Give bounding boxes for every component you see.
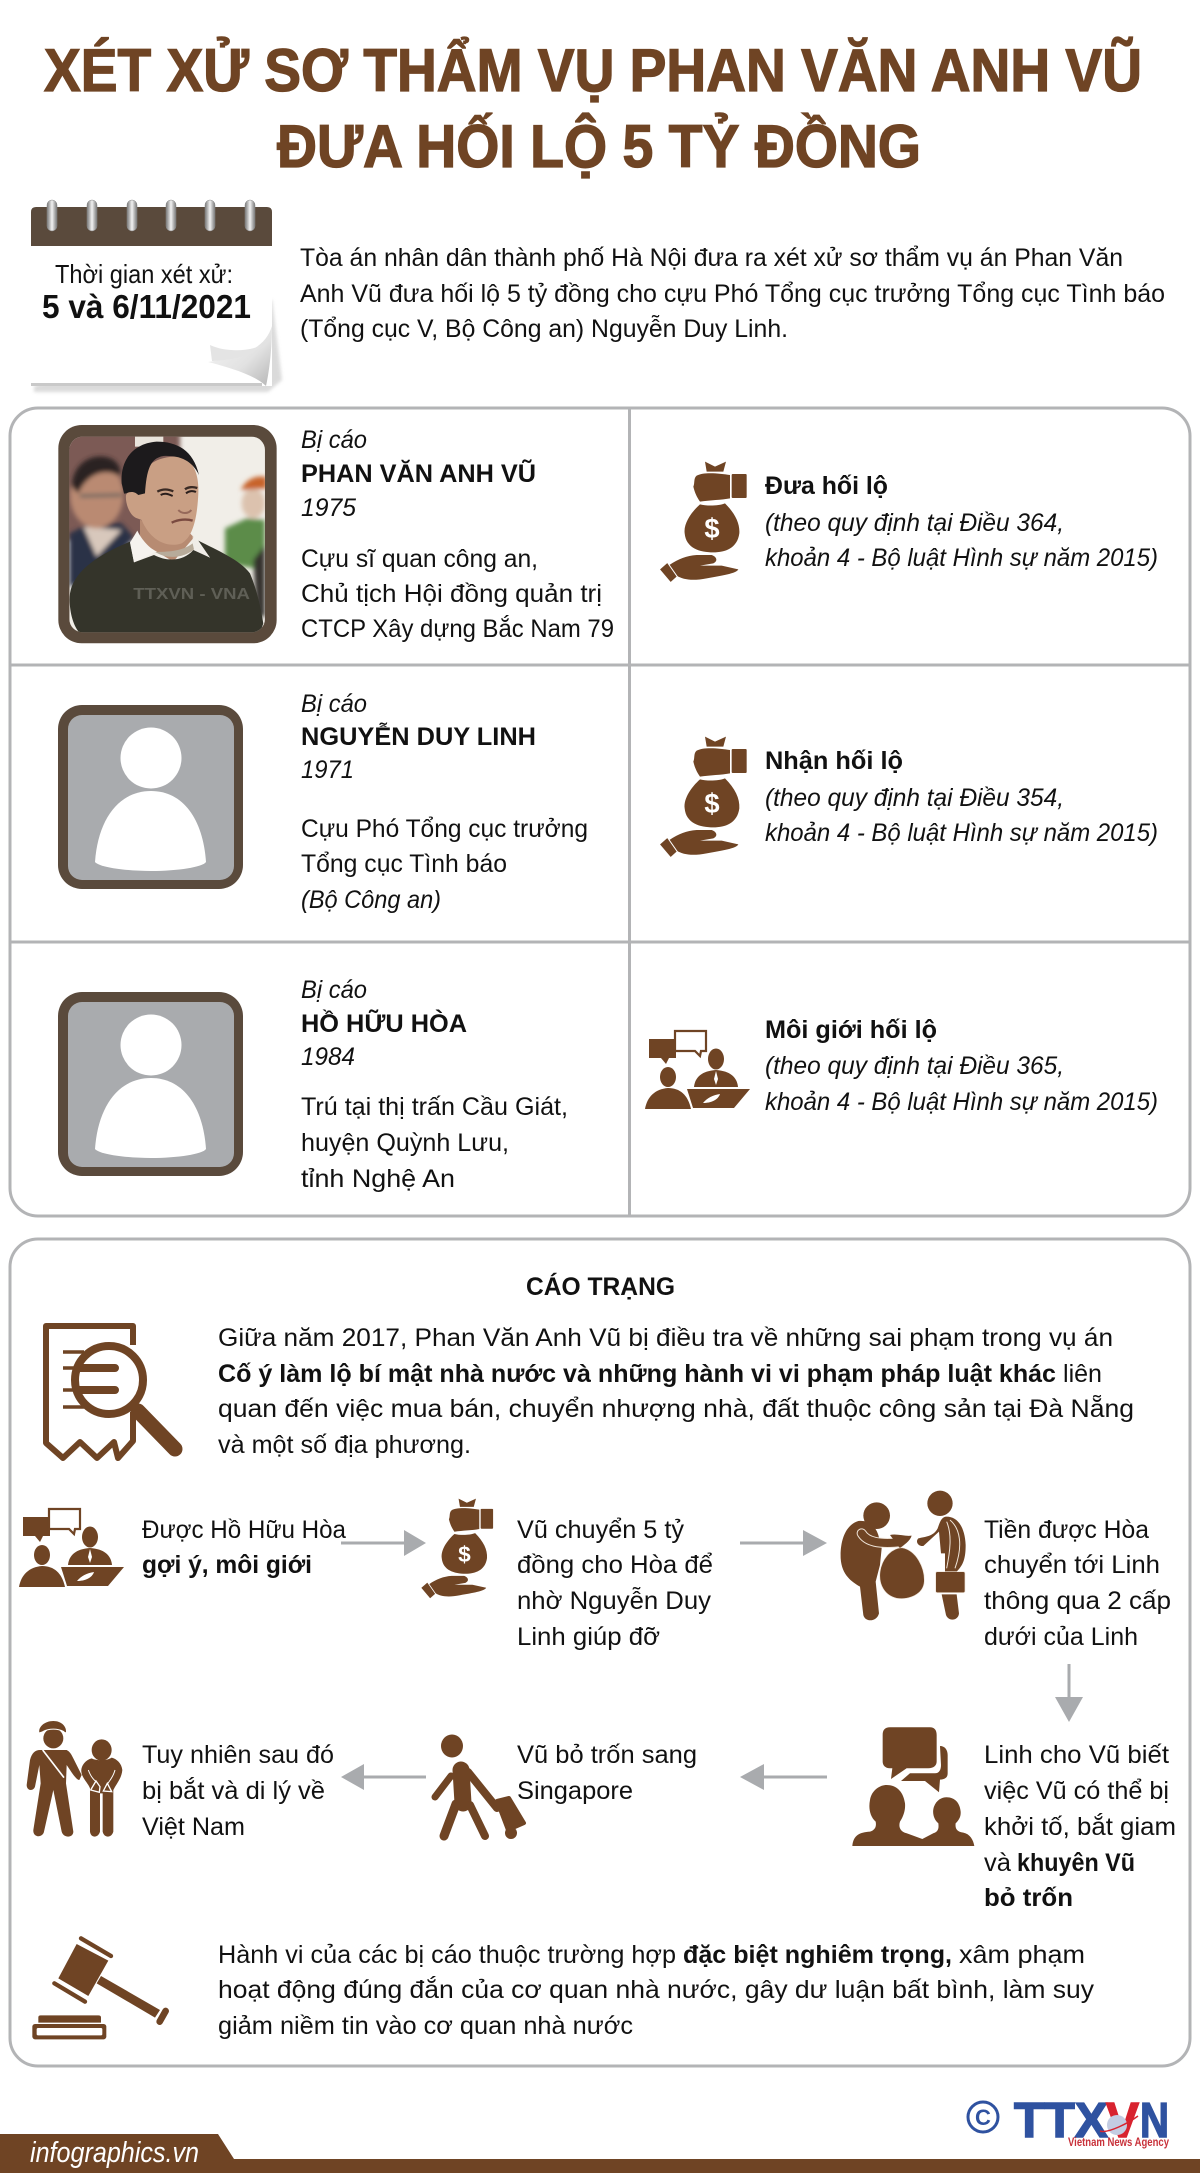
text: indictment intro: Cố ý làm lộ bí mật nhà nước và những hành vi vi phạm pháp luật khác — [218, 1360, 1056, 1388]
intro paragraph: Anh Vũ đưa hối lộ 5 tỷ đồng cho cựu Phó Tổng cục trưởng Tổng cục Tình báo — [300, 280, 1165, 308]
text: defendant 1: 1975 — [301, 494, 356, 522]
text: step 3: thông qua 2 cấp — [984, 1587, 1171, 1615]
footer bar — [0, 2134, 1200, 2173]
icon: person walking with suitcase — [435, 1734, 524, 1839]
text: charge 3 — [765, 1016, 1158, 1116]
icon: calendar with trial date: 5 và 6/11/2021 — [42, 288, 251, 325]
portrait placeholder: Hồ Hữu Hòa — [58, 992, 243, 1176]
text: charge 1: Đưa hối lộ — [765, 472, 888, 500]
icon: calendar with trial date: Thời gian xét xử: — [55, 259, 233, 289]
text: indictment intro: quan đến việc mua bán, chuyển nhượng nhà, đất thuộc công sản tại Đà Nẵng — [218, 1394, 1134, 1423]
text: step 6: Tuy nhiên sau đó — [142, 1741, 334, 1769]
photo: Phan Văn Anh Vũ — [58, 425, 277, 643]
text: step 4: việc Vũ có thể bị — [984, 1777, 1169, 1805]
logo: TTXVN: V — [1106, 2094, 1139, 2148]
text: conclusion — [218, 1941, 1095, 2040]
text: indictment intro: liên — [1063, 1360, 1102, 1388]
icon: police officer with arrested man — [27, 1721, 122, 1837]
text: defendant 1: CTCP Xây dựng Bắc Nam 79 — [301, 614, 614, 643]
text: step 2: Vũ chuyển 5 tỷ — [517, 1516, 684, 1544]
text: step 4 — [984, 1741, 1176, 1912]
arrow 5 — [341, 1764, 426, 1790]
text: conclusion: đặc biệt nghiêm trọng, — [683, 1941, 952, 1969]
text: defendant 3: tỉnh Nghệ An — [301, 1165, 455, 1193]
text: defendant 3: Trú tại thị trấn Cầu Giát, — [301, 1093, 568, 1121]
text: step 2: đồng cho Hòa để — [517, 1551, 713, 1579]
text: indictment intro: Giữa năm 2017, Phan Văn Anh Vũ bị điều tra về những sai phạm trong vụ án — [218, 1324, 1113, 1352]
text: defendant 3: HỒ HỮU HÒA — [301, 1008, 467, 1038]
text: conclusion: xâm phạm — [959, 1941, 1085, 1969]
panel: defendants table — [10, 408, 1190, 1216]
intro paragraph: Tòa án nhân dân thành phố Hà Nội đưa ra xét xử sơ thẩm vụ án Phan Văn — [300, 244, 1123, 272]
text: defendant 1 — [301, 426, 614, 643]
text: charge 3: Môi giới hối lộ — [765, 1016, 937, 1044]
intro paragraph: (Tổng cục V, Bộ Công an) Nguyễn Duy Linh. — [300, 314, 788, 343]
text: indictment intro: và một số địa phương. — [218, 1431, 471, 1459]
text: step 2: nhờ Nguyễn Duy — [517, 1586, 711, 1615]
text: defendant 3: 1984 — [301, 1043, 355, 1071]
text: defendant 2 — [301, 690, 588, 914]
text: defendant 2: (Bộ Công an) — [301, 886, 441, 914]
logo: TTXVN: N — [1140, 2094, 1169, 2148]
portrait placeholder: Nguyễn Duy Linh — [58, 705, 243, 889]
text: step 3: Tiền được Hòa — [984, 1516, 1149, 1544]
text: step 3 — [984, 1516, 1171, 1651]
text: step 5 — [517, 1741, 697, 1805]
text: step 3: chuyển tới Linh — [984, 1551, 1160, 1579]
logo: TTXVN: C — [975, 2105, 991, 2130]
arrow 1 — [341, 1530, 426, 1556]
arrow 2 — [740, 1530, 827, 1556]
text: step 2 — [517, 1516, 713, 1651]
text: step 6: bị bắt và di lý về — [142, 1776, 325, 1805]
icon: meeting 1 — [645, 1031, 750, 1109]
text: defendant 3 — [301, 976, 568, 1193]
text: charge 1: (theo quy định tại Điều 364, — [765, 509, 1064, 537]
text: step 5: Vũ bỏ trốn sang — [517, 1741, 697, 1769]
text: step 5: Singapore — [517, 1777, 633, 1805]
icon: document and magnifier — [46, 1326, 175, 1458]
text: defendant 2: 1971 — [301, 756, 354, 784]
icon: calendar with trial date — [31, 200, 282, 392]
heading: indictment: CÁO TRẠNG — [526, 1272, 675, 1301]
text: step 4: khởi tố, bắt giam — [984, 1812, 1176, 1841]
icon: two people talking — [852, 1727, 974, 1846]
logo: TTXVN — [968, 2094, 1169, 2149]
text: step 1: gợi ý, môi giới — [142, 1551, 312, 1579]
text: charge 1: khoản 4 - Bộ luật Hình sự năm 2015) — [765, 544, 1158, 572]
text: step 4: Linh cho Vũ biết — [984, 1741, 1169, 1769]
icon: money bag 1 — [659, 462, 747, 583]
text: step 6: Việt Nam — [142, 1813, 245, 1841]
text: charge 2: khoản 4 - Bộ luật Hình sự năm 2015) — [765, 819, 1158, 847]
icon: money bag 2 — [659, 737, 747, 858]
text: conclusion: giảm niềm tin vào cơ quan nhà nước — [218, 2012, 633, 2040]
icon: meeting 2 — [19, 1509, 124, 1587]
text: indictment intro — [218, 1324, 1134, 1459]
logo: TTXVN: TTX — [1014, 2094, 1108, 2148]
text: defendant 1: Bị cáo — [301, 426, 367, 454]
text: defendant 3: Bị cáo — [301, 976, 367, 1004]
text: charge 3: (theo quy định tại Điều 365, — [765, 1052, 1064, 1080]
text: step 4: khuyên Vũ — [1017, 1849, 1135, 1877]
text: step 1: Được Hồ Hữu Hòa — [142, 1516, 346, 1544]
title — [44, 37, 1142, 180]
text: defendant 2: Bị cáo — [301, 690, 367, 718]
logo: TTXVN: Vietnam News Agency — [1068, 2135, 1169, 2149]
text: charge 2: Nhận hối lộ — [765, 747, 903, 775]
text: defendant 1: Cựu sĩ quan công an, — [301, 545, 538, 573]
text: charge 2: (theo quy định tại Điều 354, — [765, 784, 1064, 812]
text: step 4: và — [984, 1849, 1011, 1877]
icon: handing over a bag of money — [841, 1491, 966, 1620]
text: step 2: Linh giúp đỡ — [517, 1623, 660, 1651]
text: step 6 — [142, 1741, 334, 1841]
icon: gavel — [32, 1938, 166, 2039]
text: defendant 1: Chủ tịch Hội đồng quản trị — [301, 580, 602, 608]
text: defendant 2: Cựu Phó Tổng cục trưởng — [301, 815, 588, 843]
text: defendant 2: Tổng cục Tình báo — [301, 850, 507, 878]
text: conclusion: hoạt động đúng đắn của cơ quan nhà nước, gây dư luận bất bình, làm suy — [218, 1975, 1095, 2004]
text: defendant 2: NGUYỄN DUY LINH — [301, 721, 536, 751]
icon: money bag 3 — [421, 1499, 493, 1599]
text: step 4: bỏ trốn — [984, 1884, 1073, 1912]
text: step 1 — [142, 1516, 346, 1579]
text: step 3: dưới của Linh — [984, 1623, 1138, 1651]
photo: Phan Văn Anh Vũ: TTXVN - VNA — [133, 586, 250, 603]
text: conclusion: Hành vi của các bị cáo thuộc trường hợp — [218, 1941, 676, 1969]
text: charge 3: khoản 4 - Bộ luật Hình sự năm 2015) — [765, 1088, 1158, 1116]
text: defendant 1: PHAN VĂN ANH VŨ — [301, 458, 536, 488]
title: ĐƯA HỐI LỘ 5 TỶ ĐỒNG — [277, 113, 921, 180]
arrow 4 — [740, 1764, 827, 1790]
text: charge 1 — [765, 472, 1158, 572]
intro paragraph — [300, 244, 1165, 343]
text: defendant 3: huyện Quỳnh Lưu, — [301, 1129, 509, 1157]
panel: indictment — [10, 1239, 1190, 2066]
footer: website: infographics.vn — [30, 2137, 199, 2169]
text: charge 2 — [765, 747, 1158, 847]
arrow 3 — [1055, 1664, 1083, 1722]
